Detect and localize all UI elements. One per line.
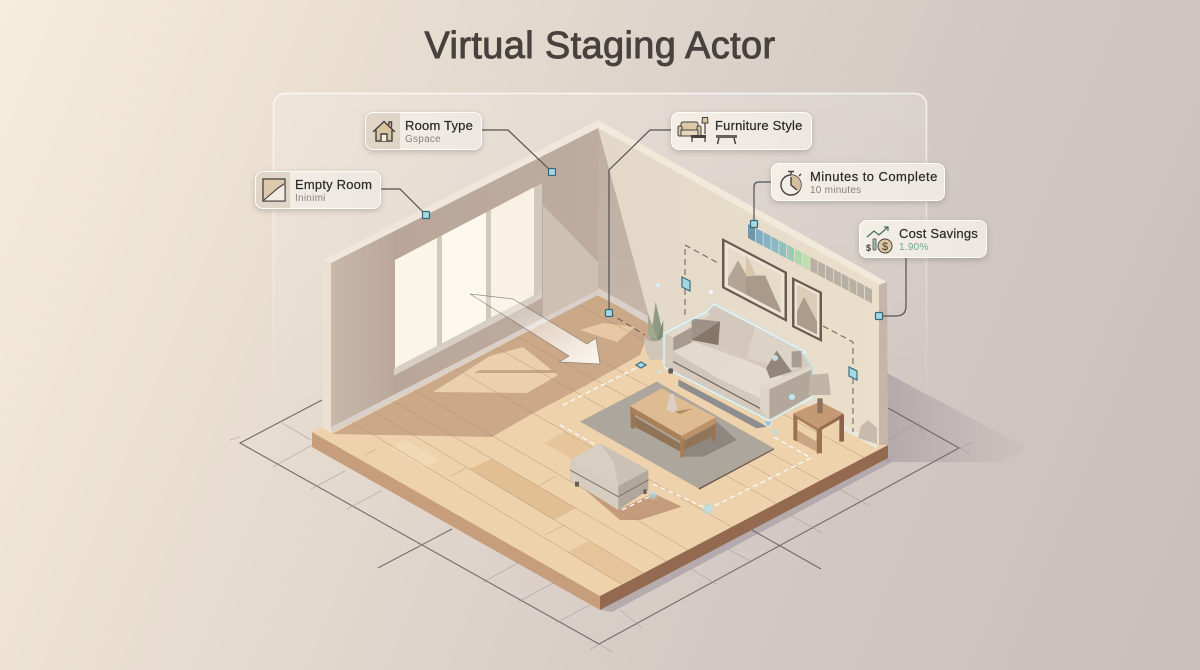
- sunlight patches: [433, 347, 558, 393]
- icon: furniture: [678, 117, 708, 142]
- baseboard: [331, 290, 598, 433]
- icon: savings chart: $: [866, 243, 871, 253]
- connector: Room Type: [482, 130, 556, 176]
- floor shadow: [332, 295, 652, 437]
- icon: house: [372, 120, 396, 142]
- arrow: [470, 294, 600, 364]
- card: Cost Savings: 1.90%: [899, 242, 929, 253]
- connector: Empty Room: [381, 189, 430, 218]
- card: Furniture Style: Furniture Style: [715, 118, 803, 132]
- wall shadow: [598, 128, 651, 324]
- side table and lamp: [793, 373, 844, 453]
- connector: Furniture Style: [606, 130, 671, 316]
- dashed selection lines: [560, 245, 853, 514]
- pillows: [692, 318, 720, 345]
- floor top: [312, 290, 888, 596]
- wood floor platform: [312, 290, 888, 610]
- card: Furniture Style: [671, 112, 812, 150]
- icon: table: [716, 135, 737, 144]
- icon: savings chart: [866, 226, 892, 254]
- card: Room Type: Gspace: [405, 134, 441, 145]
- glass backdrop panel: [274, 94, 926, 424]
- rug shadow: [683, 420, 737, 457]
- rug: [580, 382, 774, 488]
- card: Empty Room: [255, 171, 381, 209]
- sofa highlight: [664, 304, 812, 421]
- ground shadow: [600, 372, 1027, 612]
- progress meter on wall: [748, 224, 872, 303]
- baseboard: [598, 288, 650, 325]
- card: Cost Savings: [859, 220, 987, 258]
- icon: savings chart: $: [882, 241, 888, 253]
- framed art small: [792, 277, 822, 342]
- furniture group (coordinates 3x): [570, 302, 844, 520]
- card: Room Type: [365, 112, 482, 150]
- connector: Cost Savings: [876, 258, 906, 320]
- card: Minutes to Complete: [771, 163, 945, 201]
- ground grid lines: [230, 400, 972, 652]
- wall cap: [598, 120, 887, 285]
- small diamond nodes: [636, 277, 857, 380]
- ottoman: [570, 443, 682, 520]
- lit area on wall: [543, 205, 598, 322]
- card: Minutes to Complete: Minutes to Complete: [810, 168, 938, 184]
- framed art large: [722, 238, 787, 322]
- sofa silhouette: [665, 305, 812, 421]
- sofa: [664, 304, 812, 428]
- plank colour bands: [470, 459, 576, 520]
- window: [394, 183, 542, 376]
- icon: stopwatch: [780, 170, 802, 196]
- card: Room Type: Room Type: [405, 118, 473, 132]
- vase: [666, 394, 677, 413]
- coffee table: [630, 388, 716, 457]
- icon: empty room: [262, 178, 286, 202]
- left wall: [323, 120, 598, 433]
- card: Minutes to Complete: 10 minutes: [810, 185, 861, 196]
- connector: Minutes to Complete: [750, 182, 771, 228]
- card: Cost Savings: Cost Savings: [899, 226, 978, 240]
- floor side right: [600, 445, 888, 610]
- plank lines: [352, 304, 865, 584]
- card: Empty Room: Ininimi: [295, 193, 326, 204]
- card: Empty Room: Empty Room: [295, 176, 372, 192]
- right arm: [760, 366, 812, 389]
- floor side left: [312, 432, 600, 610]
- left arm: [665, 310, 710, 337]
- right wall: [598, 120, 888, 449]
- title: Virtual Staging Actor: [425, 25, 775, 67]
- back cushions: [707, 305, 755, 358]
- plant: [644, 302, 663, 360]
- seat cushions: [673, 342, 745, 377]
